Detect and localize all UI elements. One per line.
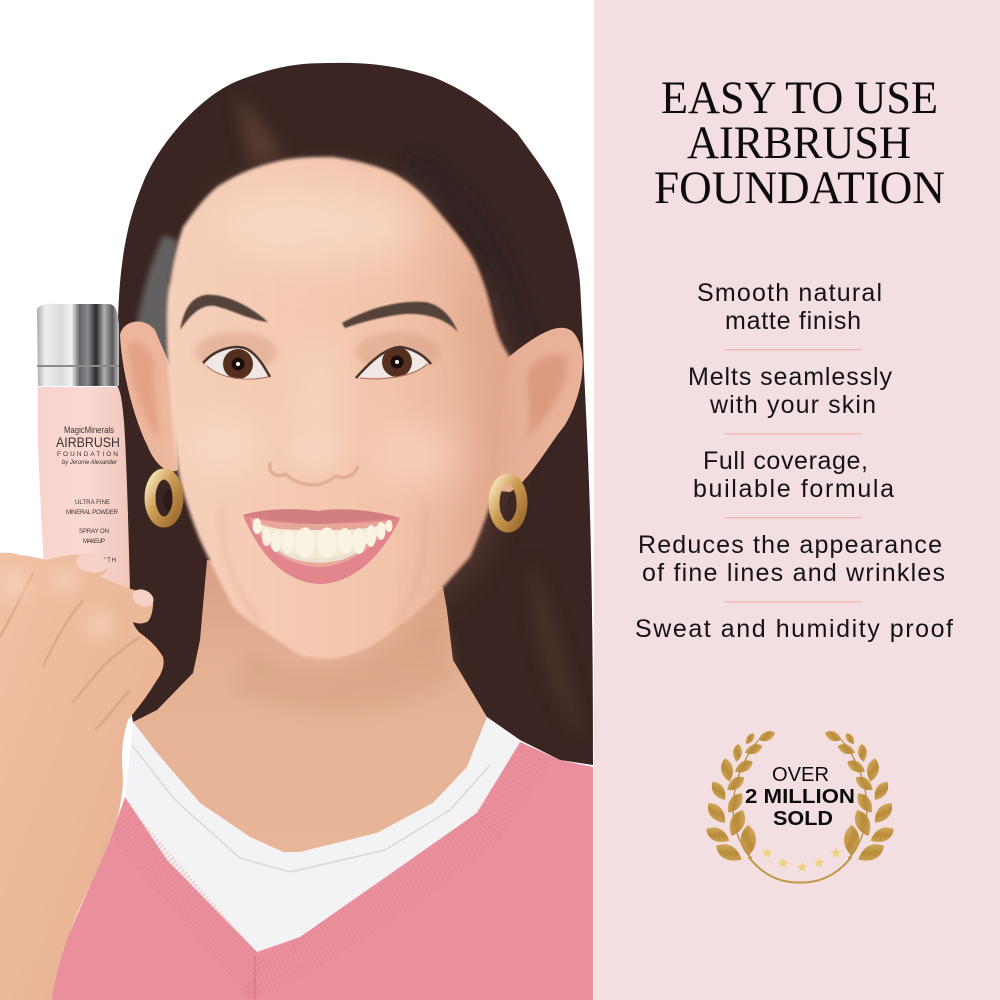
benefit: melts seamlessly: with your skin	[709, 391, 876, 419]
right eyebrow	[342, 302, 458, 332]
badge text: SOLD	[773, 807, 833, 830]
benefit: reduces fine lines: Reduces the appearance	[638, 531, 942, 559]
title: EASY TO USE	[661, 72, 938, 124]
mouth	[243, 509, 400, 584]
stars	[762, 848, 842, 872]
bottle label: FOUNDATION	[57, 451, 118, 458]
left ear	[120, 322, 178, 471]
upper lip	[243, 509, 400, 524]
nose	[270, 430, 358, 485]
face	[167, 157, 510, 659]
right earring	[494, 479, 522, 527]
hair	[117, 63, 593, 765]
face shading	[185, 185, 506, 610]
benefit: full coverage: Full coverage,	[703, 447, 868, 475]
bottle label: by Jerome Alexander	[62, 460, 118, 466]
bottle label: ULTRA FINE	[75, 500, 110, 506]
neck shadow	[230, 610, 455, 711]
badge text: 2 MILLION	[745, 785, 855, 808]
smile folds	[221, 505, 426, 625]
tee collar seam	[132, 745, 490, 872]
lower lip	[243, 512, 400, 584]
benefit: melts seamlessly: Melts seamlessly	[688, 363, 892, 391]
hair highlights	[235, 95, 585, 740]
white tee	[125, 717, 520, 952]
benefit: full coverage	[693, 447, 894, 503]
bottle label: MINERAL POWDER	[66, 510, 119, 516]
benefit: reduces fine lines: of fine lines and wrinkles	[642, 559, 945, 587]
benefit: full coverage: builable formula	[693, 475, 894, 503]
benefit: smooth finish	[697, 279, 882, 335]
left earring	[150, 474, 178, 522]
knuckle lines	[0, 573, 140, 730]
mouth interior	[250, 518, 393, 567]
bottle label: AIRBRUSH	[56, 434, 120, 450]
right eye	[356, 332, 440, 379]
product bottle	[37, 304, 130, 590]
benefit: reduces fine lines	[638, 531, 945, 587]
bottle label: MAKEUP	[83, 539, 105, 545]
bottle label: OOTH	[96, 558, 116, 564]
benefit: sweat proof: Sweat and humidity proof	[635, 615, 953, 643]
left eye	[196, 332, 276, 379]
grey hair at temple	[136, 235, 178, 385]
sweater rib collar	[118, 752, 537, 1000]
badge text: OVER	[772, 763, 829, 786]
photo: woman holding foundation bottle	[0, 63, 593, 1000]
bottle label: MagicMinerals	[64, 425, 114, 435]
title: AIRBRUSH	[687, 117, 911, 169]
title	[654, 72, 945, 214]
benefit: melts seamlessly	[688, 363, 892, 419]
bottle label	[56, 425, 120, 564]
bottle body	[38, 387, 130, 590]
left eyebrow	[180, 295, 268, 330]
bottle chrome cap	[37, 304, 119, 386]
teeth backing	[256, 522, 391, 558]
teeth	[252, 518, 392, 558]
hand holding bottle	[0, 551, 164, 1000]
neck	[133, 560, 487, 852]
lower teeth	[278, 545, 360, 563]
right ear	[485, 328, 583, 492]
fingernails	[75, 551, 109, 575]
badge text	[745, 763, 855, 830]
benefit: smooth finish: matte finish	[725, 307, 861, 335]
laurel wreath	[703, 729, 897, 883]
pink sweater	[40, 742, 593, 1000]
knuckle highlights	[1, 570, 114, 637]
bottle label: SPRAY ON	[79, 529, 109, 535]
badge: over 2 million sold	[703, 729, 897, 883]
right panel background	[594, 0, 1000, 1000]
title: FOUNDATION	[654, 162, 945, 214]
benefits list	[635, 279, 953, 643]
benefit: smooth finish: Smooth natural	[697, 279, 882, 307]
